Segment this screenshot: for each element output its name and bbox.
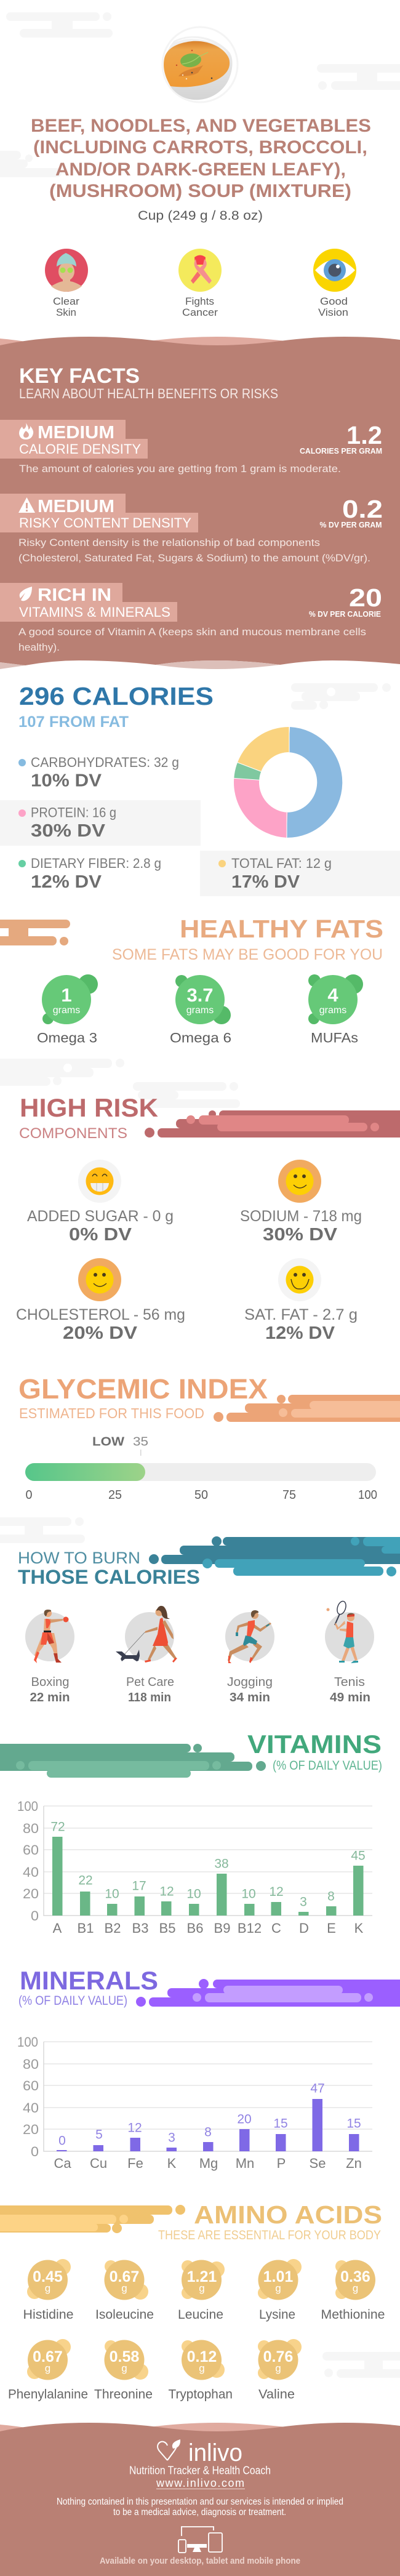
activity: pet care: Pet Care: [126, 1675, 174, 1689]
fact: calorie density: CALORIE DENSITY: [19, 441, 141, 457]
bar chart: minerals: 5: [95, 2127, 103, 2142]
bar chart: vitamins: E: [327, 1920, 336, 1936]
amino acid: histidine: g: [45, 2282, 50, 2294]
bar chart: vitamins: 10: [105, 1887, 119, 1901]
fact: rich in vitamins and minerals: [0, 583, 382, 653]
activity: tennis: 49 min: [330, 1691, 370, 1704]
decoration: minerals cloud: [136, 1979, 400, 2007]
amino acid: lysine: g: [275, 2282, 281, 2294]
fact: rich in vitamins and minerals: healthy).: [18, 642, 60, 653]
bar chart: vitamins: 8: [327, 1890, 335, 1903]
activity: jogging: [225, 1610, 274, 1704]
donut chart: macronutrients: [233, 726, 330, 838]
label: fights cancer: Cancer: [182, 307, 218, 318]
disclaimer: Nothing contained in this presentation and our services is intended or implied: [57, 2497, 343, 2507]
icon: warning triangle: [18, 497, 35, 513]
availability note: Available on your desktop, tablet and mobile phone: [100, 2556, 300, 2566]
title: [31, 116, 371, 201]
badge: mufas: grams: [319, 1005, 346, 1016]
serving size: Cup (249 g / 8.8 oz): [138, 209, 263, 223]
title: AND/OR DARK-GREEN LEAFY),: [55, 159, 346, 180]
bar chart: minerals: 47: [310, 2082, 325, 2095]
legend: carbohydrates: CARBOHYDRATES: 32 g: [31, 755, 179, 770]
heading: minerals: MINERALS: [20, 1966, 158, 1995]
bar chart: minerals: 15: [346, 2116, 361, 2131]
bar chart: vitamins: B12: [238, 1920, 262, 1936]
fact: rich in vitamins and minerals: 20: [349, 584, 382, 612]
risk item: added sugar: 0% DV: [69, 1225, 132, 1245]
fact: risky content density: % DV PER GRAM: [320, 520, 382, 529]
bar chart: vitamins: 20: [23, 1886, 39, 1901]
amino acid: tryptophan: 0.12: [187, 2348, 217, 2365]
amino acid: threonine: Threonine: [94, 2387, 153, 2402]
bar chart: vitamins: 100: [17, 1799, 38, 1814]
bar chart: minerals: 0: [31, 2144, 39, 2159]
bar chart: minerals: Mn: [236, 2156, 254, 2171]
website link: www.inlivo.com: [156, 2477, 244, 2489]
amino acid: isoleucine: g: [121, 2282, 127, 2294]
amino acid: threonine: 0.58: [110, 2348, 139, 2365]
logo: inlivo heart: [158, 2439, 242, 2466]
amino acid: threonine: [94, 2340, 153, 2402]
risk item: sodium: SODIUM - 718 mg: [240, 1208, 362, 1225]
bar chart: vitamins: C: [271, 1920, 281, 1936]
amino acid: isoleucine: [95, 2260, 154, 2322]
amino acid: isoleucine: 0.67: [110, 2268, 139, 2285]
amino acid: leucine: Leucine: [178, 2308, 223, 2322]
legend: protein: [0, 800, 201, 846]
bar chart: minerals: 0: [58, 2133, 66, 2148]
bar chart: minerals: 20: [237, 2113, 252, 2126]
bar chart: minerals: Zn: [346, 2156, 362, 2171]
fact: risky content density: (Cholesterol, Saturated Fat, Sugars & Sodium) to the amount (%DV/gr).: [18, 553, 370, 564]
bar chart: vitamins: D: [299, 1920, 309, 1936]
risk item: cholesterol: [16, 1258, 185, 1343]
amino acid: lysine: 1.01: [263, 2268, 293, 2285]
heading: how to burn those calories: HOW TO BURN: [18, 1549, 140, 1567]
amino acid: methionine: Methionine: [321, 2308, 385, 2322]
fact: calorie density: 1.2: [346, 421, 382, 449]
disclaimer: to be a medical advice, diagnosis or treatment.: [113, 2507, 286, 2518]
gauge: glycemic index: 0: [26, 1488, 32, 1502]
tagline: Nutrition Tracker & Health Coach: [129, 2465, 271, 2477]
subheading: calories from fat: 107 FROM FAT: [18, 713, 129, 731]
fact: risky content density: [0, 494, 383, 564]
decoration: glycemic cloud: [214, 1395, 400, 1422]
bar chart: vitamins: B2: [105, 1920, 121, 1936]
decoration: high risk cloud: [145, 1110, 400, 1138]
gauge: glycemic index: 50: [194, 1488, 208, 1502]
fact: calorie density: MEDIUM: [38, 423, 114, 443]
label: good vision: Vision: [318, 307, 348, 318]
background cloud: burn calories: [0, 1517, 85, 1543]
amino acid: histidine: Histidine: [23, 2308, 74, 2322]
bar chart: minerals: K: [167, 2156, 177, 2171]
badge: omega 3: Omega 3: [37, 1030, 97, 1045]
title: BEEF, NOODLES, AND VEGETABLES: [31, 116, 371, 136]
icon: flame: [19, 423, 33, 439]
activity: jogging: 34 min: [230, 1691, 270, 1704]
subheading: key facts: LEARN ABOUT HEALTH BENEFITS OR RISKS: [19, 386, 278, 401]
gauge: glycemic index: 35: [133, 1435, 148, 1449]
badge: omega 3: 1: [61, 984, 72, 1006]
bar chart: vitamins: B9: [214, 1920, 230, 1936]
background clouds: high risk: [0, 1059, 240, 1108]
activity: boxing: 22 min: [30, 1691, 70, 1704]
badge: omega 3: grams: [53, 1005, 80, 1016]
heading: how to burn those calories: THOSE CALORIES: [18, 1566, 200, 1588]
bar chart: vitamins: B5: [159, 1920, 175, 1936]
bar chart: minerals: 20: [23, 2122, 39, 2137]
amino acid: valine: 0.76: [263, 2348, 293, 2365]
amino acid: lysine: Lysine: [259, 2308, 295, 2322]
food image: soup bowl: [162, 27, 238, 102]
legend: dietary fiber: 12% DV: [31, 872, 102, 892]
decoration: healthy fats cloud: [0, 920, 70, 945]
activity: jogging: Jogging: [227, 1675, 273, 1689]
amino acid: threonine: g: [121, 2362, 127, 2374]
bar chart: vitamins: 10: [241, 1887, 256, 1901]
risk item: added sugar: ADDED SUGAR - 0 g: [27, 1208, 174, 1225]
bar chart: vitamins: 22: [78, 1874, 93, 1887]
bar chart: minerals: Mg: [199, 2156, 218, 2171]
bar chart: vitamins: A: [53, 1920, 62, 1936]
bar chart: vitamins: 0: [31, 1908, 39, 1924]
decoration: amino acids cloud: [0, 2205, 185, 2233]
badge: omega 6: grams: [186, 1005, 214, 1016]
gauge: glycemic index: 75: [282, 1488, 296, 1502]
bar chart: minerals: P: [277, 2156, 286, 2171]
risk item: cholesterol: CHOLESTEROL - 56 mg: [16, 1306, 185, 1323]
risk item: cholesterol: 20% DV: [63, 1323, 138, 1343]
heading: vitamins: VITAMINS: [247, 1730, 382, 1759]
fact: rich in vitamins and minerals: % DV PER CALORIE: [309, 609, 381, 619]
background cloud: top left: [6, 12, 113, 38]
badge: omega 3: [37, 974, 98, 1045]
amino acid: valine: [258, 2339, 302, 2402]
fact: risky content density: 0.2: [342, 495, 383, 523]
background cloud: calories: [291, 683, 391, 710]
fact: risky content density: MEDIUM: [38, 497, 114, 516]
bar chart: minerals: Fe: [127, 2156, 143, 2171]
bar chart: minerals: Ca: [54, 2156, 71, 2171]
heading: amino acids: AMINO ACIDS: [194, 2201, 382, 2229]
risk item: saturated fat: [244, 1258, 358, 1343]
title: (INCLUDING CARROTS, BROCCOLI,: [33, 137, 367, 158]
bar chart: minerals: 12: [127, 2121, 142, 2135]
decoration: burn calories cloud: [149, 1536, 400, 1576]
heading: healthy fats: HEALTHY FATS: [180, 915, 383, 943]
bar chart: vitamins: 17: [132, 1879, 146, 1893]
activity: boxing: Boxing: [31, 1675, 69, 1689]
bar chart: vitamins: B3: [132, 1920, 148, 1936]
amino acid: isoleucine: Isoleucine: [95, 2308, 154, 2322]
background cloud: left of title: [0, 151, 62, 177]
legend: dietary fiber: DIETARY FIBER: 2.8 g: [31, 856, 161, 871]
amino acid: histidine: 0.45: [33, 2268, 63, 2285]
legend: carbohydrates: [18, 755, 179, 790]
risk item: sodium: [240, 1160, 362, 1245]
activity: pet care: [116, 1606, 177, 1704]
bar chart: minerals: Se: [310, 2156, 326, 2171]
fact: rich in vitamins and minerals: RICH IN: [38, 585, 111, 605]
bar chart: vitamins: 40: [23, 1864, 39, 1880]
bar chart: minerals: 80: [23, 2056, 39, 2072]
amino acid: leucine: [178, 2260, 225, 2322]
risk item: added sugar: [27, 1160, 174, 1245]
bar chart: minerals: 15: [273, 2116, 288, 2131]
icon: clear skin: [45, 249, 88, 292]
bar chart: minerals: 3: [168, 2131, 175, 2145]
bar chart: minerals: 100: [17, 2034, 38, 2050]
gauge: glycemic index: LOW: [92, 1435, 124, 1449]
badge: omega 6: 3.7: [186, 984, 214, 1006]
heading: key facts: KEY FACTS: [19, 364, 140, 388]
heading: how to burn those calories: [18, 1549, 200, 1588]
amino acid: tryptophan: g: [199, 2362, 205, 2374]
badge: mufas: 4: [327, 984, 338, 1006]
amino acid: tryptophan: [169, 2340, 233, 2402]
gauge: glycemic index: 25: [108, 1488, 122, 1502]
bar chart: vitamins: 80: [23, 1821, 39, 1836]
bar chart: vitamins: 60: [23, 1842, 39, 1858]
gauge: glycemic index: [25, 1435, 377, 1502]
amino acid: leucine: g: [199, 2282, 205, 2294]
activity: boxing: [25, 1610, 74, 1704]
risk item: saturated fat: 12% DV: [265, 1323, 335, 1343]
bar chart: vitamins: 12: [269, 1885, 284, 1899]
activity: pet care: 118 min: [128, 1691, 171, 1704]
label: good vision: [318, 295, 348, 318]
amino acid: histidine: [23, 2259, 74, 2322]
title: (MUSHROOM) SOUP (MIXTURE): [49, 181, 351, 201]
amino acid: phenylalanine: [8, 2339, 88, 2402]
amino acid: methionine: [321, 2260, 385, 2322]
heading: high risk: HIGH RISK: [20, 1093, 158, 1122]
label: fights cancer: [182, 295, 218, 318]
bar chart: minerals: Cu: [90, 2156, 107, 2171]
amino acid: valine: Valine: [258, 2387, 295, 2402]
subheading: vitamins daily value: (% OF DAILY VALUE): [273, 1759, 382, 1773]
subheading: components: COMPONENTS: [19, 1125, 127, 1142]
subheading: healthy fats: SOME FATS MAY BE GOOD FOR YOU: [112, 946, 383, 963]
fact: calorie density: [0, 420, 382, 475]
label: clear skin: Clear: [53, 295, 79, 307]
legend: protein: PROTEIN: 16 g: [31, 805, 116, 820]
badge: omega 6: Omega 6: [170, 1030, 231, 1045]
bar chart: vitamins: 10: [186, 1887, 201, 1901]
background cloud: bottom right: [322, 2352, 400, 2378]
amino acid: leucine: 1.21: [187, 2268, 217, 2285]
bar chart: vitamins: 3: [300, 1895, 307, 1909]
label: clear skin: [53, 295, 79, 318]
bar chart: vitamins: 45: [351, 1849, 366, 1863]
label: good vision: Good: [320, 295, 348, 307]
panel: footer: [0, 2423, 400, 2576]
legend: dietary fiber: [18, 856, 161, 892]
amino acid: phenylalanine: g: [45, 2362, 50, 2374]
activity: tennis: [325, 1600, 374, 1704]
bar chart: vitamins: 38: [214, 1856, 229, 1871]
bar chart: vitamins: [17, 1799, 372, 1936]
risk item: saturated fat: SAT. FAT - 2.7 g: [244, 1306, 358, 1323]
icon: good vision: [313, 249, 356, 292]
background cloud: top right: [317, 64, 400, 90]
fact: risky content density: Risky Content density is the relationship of bad components: [18, 537, 320, 548]
label: fights cancer: Fights: [185, 295, 214, 307]
icon: leaf: [20, 587, 32, 601]
gauge: glycemic index: 100: [358, 1488, 377, 1502]
icon: devices: [178, 2527, 222, 2553]
fact: calorie density: CALORIES PER GRAM: [300, 446, 382, 455]
fact: rich in vitamins and minerals: VITAMINS & MINERALS: [19, 604, 170, 620]
decoration: vitamins cloud: [0, 1744, 266, 1778]
badge: omega 6: [170, 975, 231, 1045]
panel: key facts: [0, 337, 400, 669]
bar chart: minerals: 60: [23, 2078, 39, 2093]
heading: glycemic index: GLYCEMIC INDEX: [18, 1373, 268, 1405]
badge: mufas: MUFAs: [311, 1030, 358, 1045]
subheading: minerals daily value: (% OF DAILY VALUE): [18, 1994, 127, 2008]
fact: rich in vitamins and minerals: A good source of Vitamin A (keeps skin and mucous membrane cells: [18, 627, 366, 638]
amino acid: tryptophan: Tryptophan: [169, 2387, 233, 2402]
logo: inlivo heart: inlivo: [188, 2439, 242, 2466]
legend: total fat: TOTAL FAT: 12 g: [231, 856, 332, 871]
label: clear skin: Skin: [56, 307, 76, 318]
legend: protein: 30% DV: [31, 821, 106, 841]
legend: total fat: 17% DV: [231, 872, 300, 892]
bar chart: vitamins: B1: [78, 1920, 94, 1936]
amino acid: lysine: [258, 2259, 302, 2322]
activity: tennis: Tenis: [334, 1675, 365, 1689]
badge: mufas: [308, 974, 363, 1045]
legend: total fat: [200, 851, 400, 896]
risk item: sodium: 30% DV: [263, 1225, 338, 1245]
bar chart: minerals: [17, 2034, 372, 2171]
legend: carbohydrates: 10% DV: [31, 771, 102, 790]
fact: calorie density: The amount of calories you are getting from 1 gram is moderate.: [19, 463, 341, 475]
bar chart: vitamins: K: [354, 1920, 364, 1936]
fact: risky content density: RISKY CONTENT DENSITY: [19, 515, 191, 531]
amino acid: methionine: g: [353, 2282, 358, 2294]
amino acid: phenylalanine: 0.67: [33, 2348, 63, 2365]
bar chart: vitamins: 72: [50, 1820, 65, 1834]
icon: fights cancer: [178, 249, 222, 292]
bar chart: minerals: 40: [23, 2100, 39, 2116]
subheading: estimated: ESTIMATED FOR THIS FOOD: [19, 1405, 204, 1421]
heading: calories: 296 CALORIES: [19, 682, 214, 710]
bar chart: vitamins: 12: [159, 1885, 174, 1898]
amino acid: valine: g: [275, 2362, 281, 2374]
disclaimer: [57, 2497, 343, 2518]
bar chart: minerals: 8: [204, 2125, 212, 2140]
amino acid: methionine: 0.36: [340, 2268, 370, 2285]
bar chart: vitamins: B6: [187, 1920, 203, 1936]
amino acid: phenylalanine: Phenylalanine: [8, 2387, 88, 2402]
